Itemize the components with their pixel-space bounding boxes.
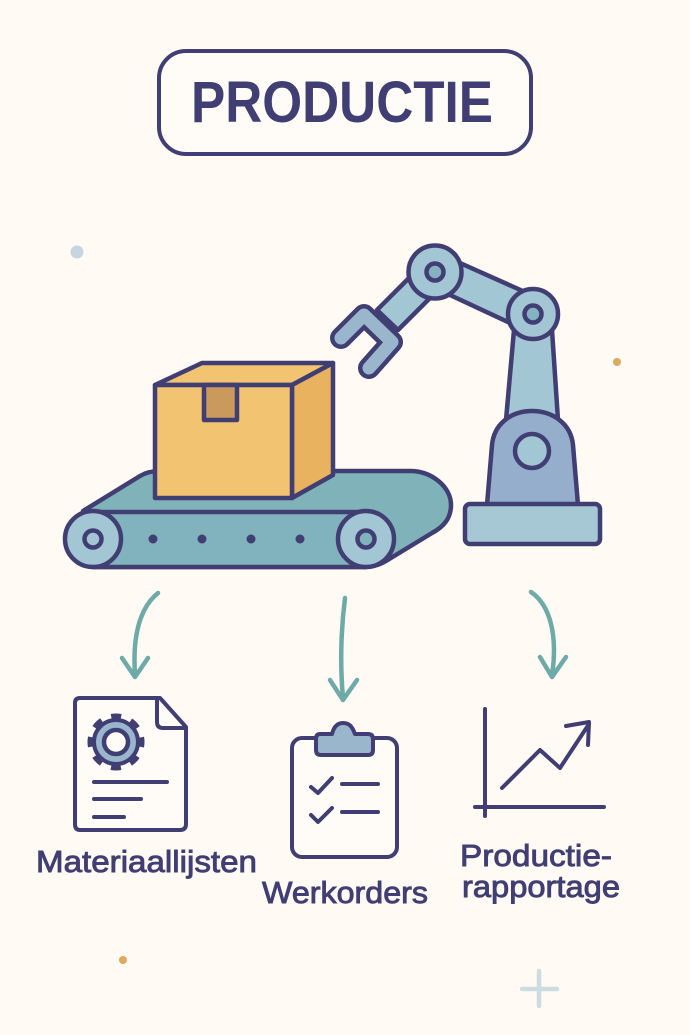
belt body [83, 471, 451, 567]
gear [91, 717, 141, 767]
decorative dot: orange right [613, 358, 621, 366]
label: Productie-rapportage: Productie- [460, 838, 612, 873]
title [159, 51, 531, 154]
clip [316, 723, 373, 755]
arrow 1 [122, 593, 158, 677]
belt front [93, 512, 366, 567]
gripper [341, 315, 392, 368]
decorative plus [522, 971, 557, 1006]
belt rollers [148, 534, 304, 544]
arrow 3 [531, 592, 566, 677]
label: Werkorders: Werkorders [262, 875, 428, 910]
box side [292, 363, 333, 498]
left wheel [65, 511, 121, 567]
arrow 2 [330, 598, 357, 700]
right wheel [338, 511, 394, 567]
upper arm [450, 263, 525, 323]
plinth [465, 504, 600, 544]
forearm [377, 277, 430, 330]
box tape [204, 385, 237, 420]
robot base dome [487, 411, 578, 505]
base joint [515, 434, 549, 468]
label: Productie-rapportage [460, 838, 620, 904]
label: Productie-rapportage: rapportage [462, 869, 620, 904]
robot arm [341, 246, 600, 544]
elbow joint [408, 246, 462, 298]
icon: clipboard [292, 723, 397, 857]
cardboard box [155, 363, 333, 498]
label: Materiaallijsten: Materiaallijsten [36, 844, 257, 879]
conveyor belt [65, 471, 451, 567]
decorative dot: blue [70, 246, 84, 258]
icon: document with gear [75, 698, 186, 830]
shoulder joint [508, 289, 558, 339]
tower [506, 330, 558, 420]
title: PRODUCTIE [191, 70, 493, 135]
decorative dot: orange bottom [119, 956, 127, 964]
box top [155, 363, 333, 385]
icon: line chart [475, 709, 604, 816]
box front [155, 385, 292, 498]
